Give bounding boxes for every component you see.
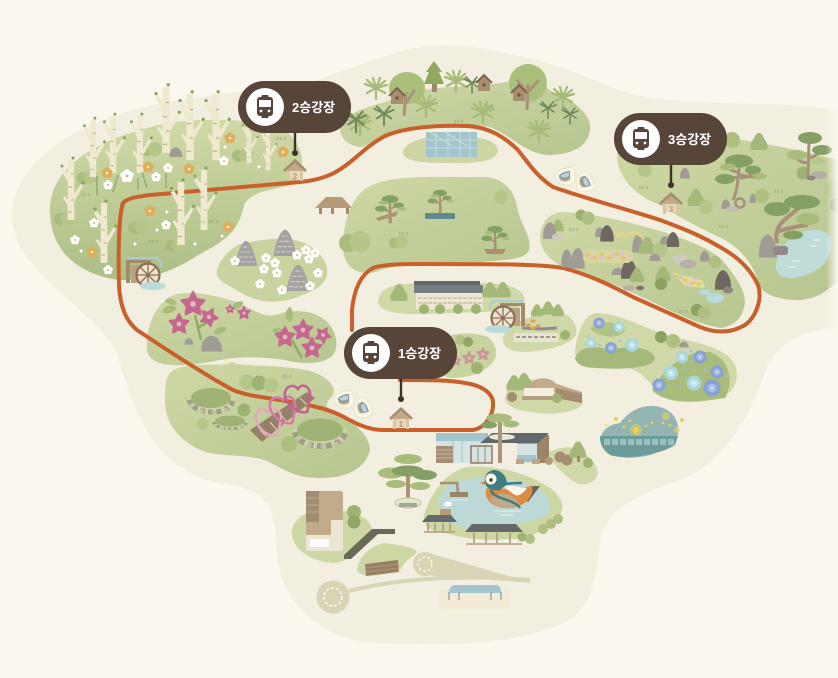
wooden bench deck [365, 560, 399, 576]
garden zone: hanok lawn [505, 380, 583, 414]
hanok house [506, 373, 582, 403]
icon: train stop capsules north [554, 167, 596, 195]
flower bed garden [514, 301, 570, 342]
marker: station 1: 1승강장 [398, 346, 441, 361]
birch forest flowers [70, 132, 289, 274]
icon: watermill east [485, 301, 525, 333]
garden zone: hydrangea lawn [575, 313, 737, 402]
marker: station 2: 2승강장 [292, 100, 335, 115]
orange shuttle route [119, 126, 760, 430]
road: south plaza path [316, 552, 533, 614]
marker: station 3 [614, 113, 727, 188]
garden zone: watermill lawn [503, 313, 577, 352]
garden zone: wall lawn [378, 283, 524, 314]
stone cairns [230, 230, 323, 294]
firefly bridge [600, 406, 684, 458]
garden zone: rose lawn [433, 334, 496, 378]
marker: station 2 [238, 81, 351, 156]
greenhouse [426, 132, 477, 157]
pavilion [315, 197, 352, 214]
mandarin duck sculpture [480, 470, 540, 515]
station 3 sign [659, 192, 683, 214]
pond: mandarin duck pond [438, 477, 550, 528]
garden zone: east small lawn [548, 447, 598, 484]
garden zone: birch forest [50, 120, 302, 280]
azalea flowers [161, 292, 334, 358]
garden zone: upper forest [340, 80, 590, 155]
pine garden trees [638, 132, 838, 267]
bonsai trees [339, 190, 510, 254]
garden zone: lower stone ring lawn [165, 362, 370, 478]
pond pavilions and cafe [422, 483, 563, 544]
grass tufts [82, 105, 782, 406]
garden zone: greenhouse lawn [403, 136, 498, 163]
garden zone: pine garden [617, 134, 838, 300]
heart bridge [250, 386, 315, 442]
garden zone: south building lawn [292, 510, 372, 563]
pond: pine garden [776, 230, 831, 278]
station 2 sign: 2 [293, 172, 298, 181]
birch forest bushes and rocks [54, 142, 253, 252]
garden zone: azalea lawn [147, 293, 336, 365]
station 3 sign: 3 [669, 205, 674, 214]
hydrangea flowers [575, 317, 730, 401]
station 2 sign [283, 159, 307, 181]
south shelter [439, 585, 509, 609]
garden zone: bench lawn [357, 543, 417, 576]
rose garden [451, 335, 489, 374]
stone rings and bushes [188, 374, 347, 452]
garden zone: bonsai lawn [343, 177, 529, 273]
large pine tree [378, 454, 437, 508]
visitor centre building [436, 414, 593, 468]
south building [306, 491, 361, 551]
rock garden [543, 210, 733, 320]
garden zone: rock garden [540, 212, 745, 328]
hanok stone wall building [391, 281, 511, 314]
marker: station 1 [344, 327, 457, 402]
icon: train stop capsules south [333, 390, 374, 421]
station 1 sign: 1 [399, 420, 404, 429]
garden zone: stone cairn lawn [217, 239, 327, 302]
upper forest trees and plants [346, 61, 578, 142]
station 1 sign [389, 407, 413, 429]
garden zone: duck pond lawn [424, 467, 563, 540]
boardwalk [344, 529, 395, 559]
birch trees [60, 83, 277, 263]
marker: station 3: 3승강장 [668, 132, 711, 147]
icon: watermill west [126, 258, 166, 290]
